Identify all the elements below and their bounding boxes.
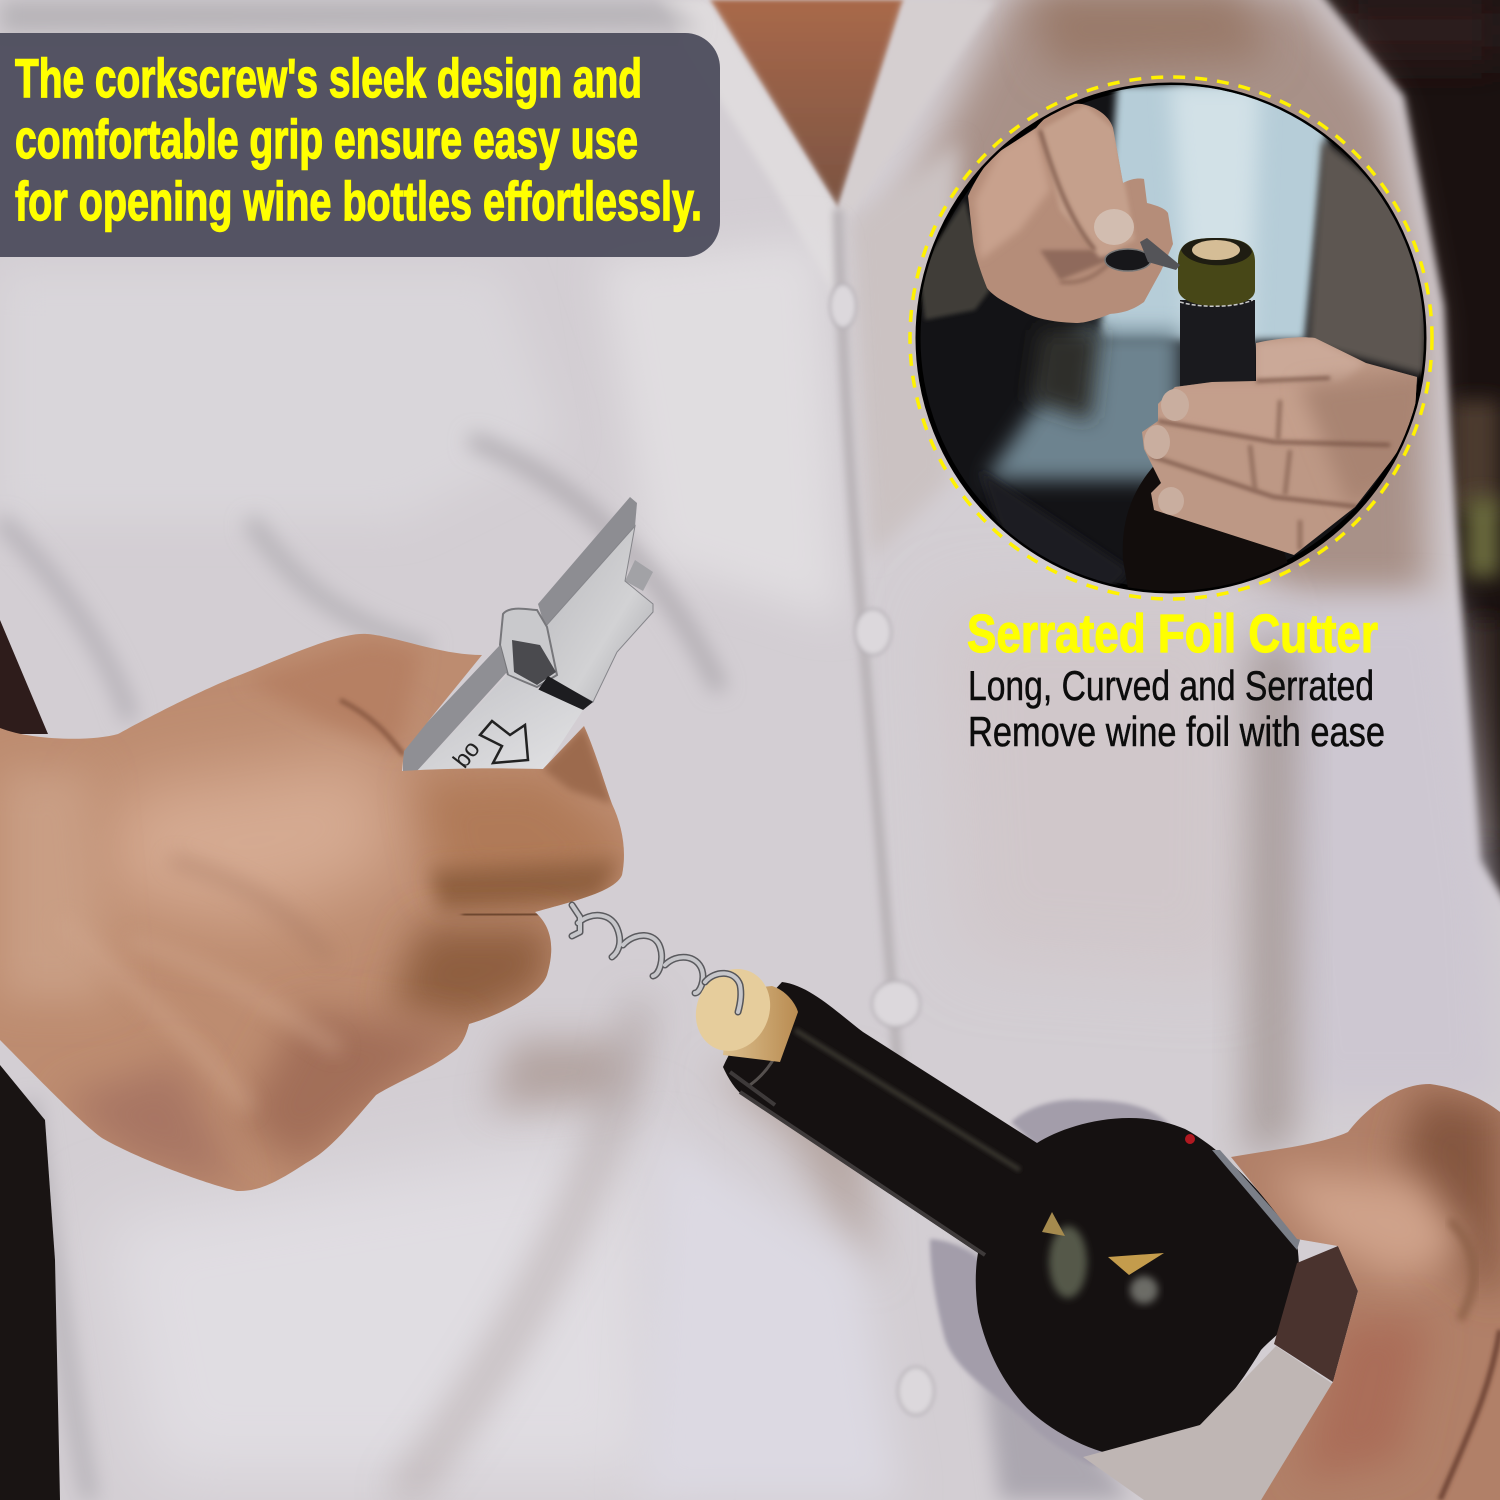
- inset lower hand: [1142, 337, 1430, 555]
- corkscrew spiral worm: [572, 905, 703, 993]
- callout panel: headline: [0, 33, 720, 257]
- grey panel under bottle: [1083, 1346, 1333, 1500]
- headline text: [15, 47, 702, 232]
- circular inset: serrated foil cutter: [918, 85, 1430, 600]
- inset bottle glass top: [1178, 238, 1255, 306]
- wine bottle: [723, 982, 1300, 1465]
- right hand holding bottle: [1231, 1084, 1500, 1500]
- caption line one: Long, Curved and Serrated: [968, 662, 1374, 709]
- inset photo: [918, 85, 1430, 600]
- opener lower plate with arrow: [417, 675, 583, 771]
- dark background right: [1300, 0, 1500, 1000]
- dark background left: [0, 620, 60, 1500]
- reflections: [1049, 1226, 1087, 1298]
- left hand holding opener: [0, 634, 624, 1191]
- feature caption: serrated foil cutter: [967, 604, 1385, 755]
- thumb nail: [1094, 209, 1134, 245]
- headline text: comfortable grip ensure easy use: [15, 108, 638, 170]
- inset background shirt: [1100, 85, 1332, 340]
- inset lower bottle: [1123, 467, 1288, 591]
- opener hinge: [500, 609, 557, 687]
- yellow dashed ring: [910, 77, 1432, 599]
- neck skin: [709, 0, 904, 209]
- cork: [683, 957, 798, 1063]
- inset upper hand: [968, 104, 1173, 323]
- screw tip in cork: [705, 973, 741, 1012]
- opener upper plate: [545, 526, 653, 702]
- shirt buttons: [830, 284, 934, 1415]
- finger nails: [1161, 389, 1189, 421]
- brown wrap behind hand: [1274, 1246, 1358, 1382]
- opener side rail: [403, 645, 507, 771]
- opener rail: [538, 497, 637, 627]
- opener tab: [625, 560, 653, 591]
- caption heading: Serrated Foil Cutter: [967, 604, 1378, 664]
- headline text: for opening wine bottles effortlessly.: [15, 170, 702, 232]
- headline text: The corkscrew's sleek design and: [15, 47, 642, 109]
- inset bottle foil: [1180, 300, 1255, 395]
- corkscrew opener body: bo: [448, 736, 486, 773]
- inset jacket: [1308, 140, 1430, 375]
- corkscrew opener body: [403, 497, 653, 773]
- caption line two: Remove wine foil with ease: [968, 708, 1385, 755]
- bottle label edge: [1212, 1150, 1300, 1250]
- red mark: [1185, 1134, 1195, 1144]
- bottle halo reflection: [930, 1100, 1170, 1465]
- inset foil cutter tool: [1105, 238, 1180, 271]
